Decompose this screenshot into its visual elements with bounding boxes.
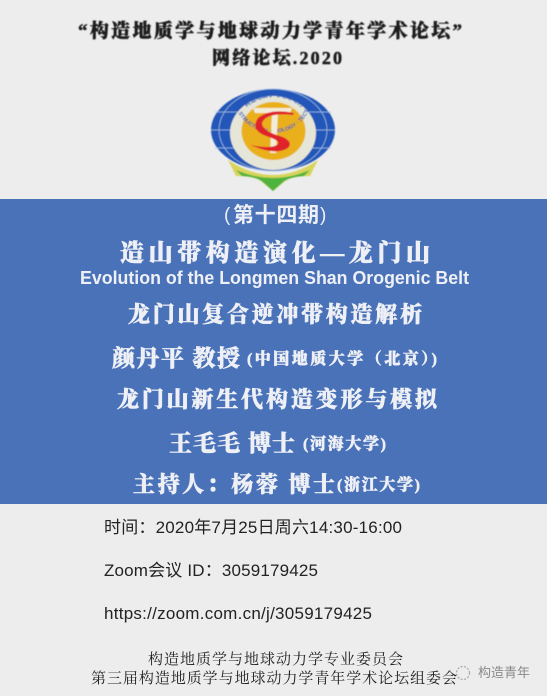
talk 2 title: 龙门山新生代构造变形与模拟: [117, 387, 439, 412]
speaker 1: [112, 345, 437, 371]
title: “构造地质学与地球动力学青年学术论坛”: [78, 19, 462, 42]
zoom id: Zoom会议 ID：3059179425: [104, 561, 318, 580]
icon: society logo: [210, 88, 336, 192]
event time: 时间：2020年7月25日周六14:30-16:00: [104, 518, 402, 537]
organizers: 构造地质学与地球动力学专业委员会: [148, 650, 403, 668]
speaker 2: (河海大学): [303, 434, 386, 453]
host: (浙江大学): [337, 475, 420, 494]
speaker 1: (中国地质大学（北京）): [247, 349, 437, 368]
speaker 1: 颜丹平 教授: [112, 345, 240, 371]
host: 主持人：杨蓉 博士: [133, 472, 335, 497]
title: 网络论坛.2020: [212, 47, 342, 68]
speaker 2: [169, 431, 386, 456]
main topic chinese: 造山带构造演化—龙门山: [120, 239, 430, 267]
title: [78, 19, 462, 68]
icon: wechat: [456, 666, 470, 680]
organizers: 第三届构造地质学与地球动力学青年学术论坛组委会: [91, 669, 457, 687]
issue number: (: [224, 205, 231, 226]
watermark: 构造青年: [478, 665, 530, 680]
panel: blue band: [0, 199, 547, 504]
zoom url: https://zoom.com.cn/j/3059179425: [104, 604, 372, 623]
organizers: [91, 650, 457, 687]
speaker 2: 王毛毛 博士: [169, 431, 295, 456]
issue number: ): [320, 205, 326, 226]
issue number: 第十四期: [233, 204, 319, 227]
main topic english: Evolution of the Longmen Shan Orogenic Belt: [80, 268, 469, 288]
talk 1 title: 龙门山复合逆冲带构造解析: [128, 302, 422, 327]
